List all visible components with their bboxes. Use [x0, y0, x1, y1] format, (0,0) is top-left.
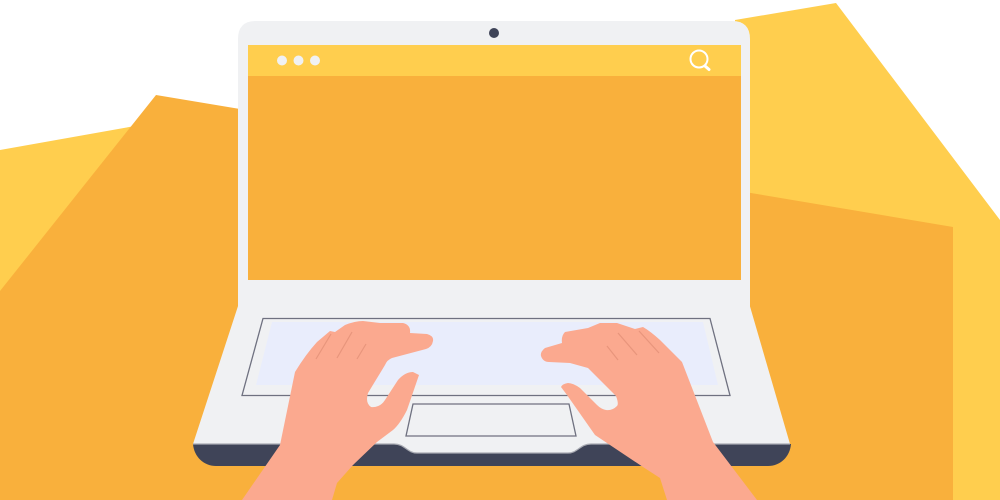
laptop lid — [238, 21, 750, 310]
keyboard outline — [242, 318, 730, 396]
touchpad — [406, 404, 576, 436]
knuckle lines — [607, 331, 659, 360]
left hand shape — [242, 321, 433, 500]
keyboard area — [242, 318, 730, 396]
laptop base deck — [193, 303, 790, 453]
keyboard surface — [256, 322, 718, 385]
laptop — [193, 21, 791, 466]
knuckle lines — [316, 332, 366, 359]
left hand — [242, 321, 433, 500]
laptop base dark edge — [193, 444, 791, 466]
window dots — [277, 56, 320, 66]
webcam — [489, 28, 499, 38]
right hand shape — [541, 323, 757, 500]
screen content area — [248, 76, 741, 280]
screen — [248, 45, 741, 280]
icon: search magnifier — [690, 50, 709, 70]
base seam line — [193, 444, 790, 453]
background: orange shape — [0, 95, 953, 500]
right hand — [541, 323, 757, 500]
browser header bar — [248, 45, 741, 76]
